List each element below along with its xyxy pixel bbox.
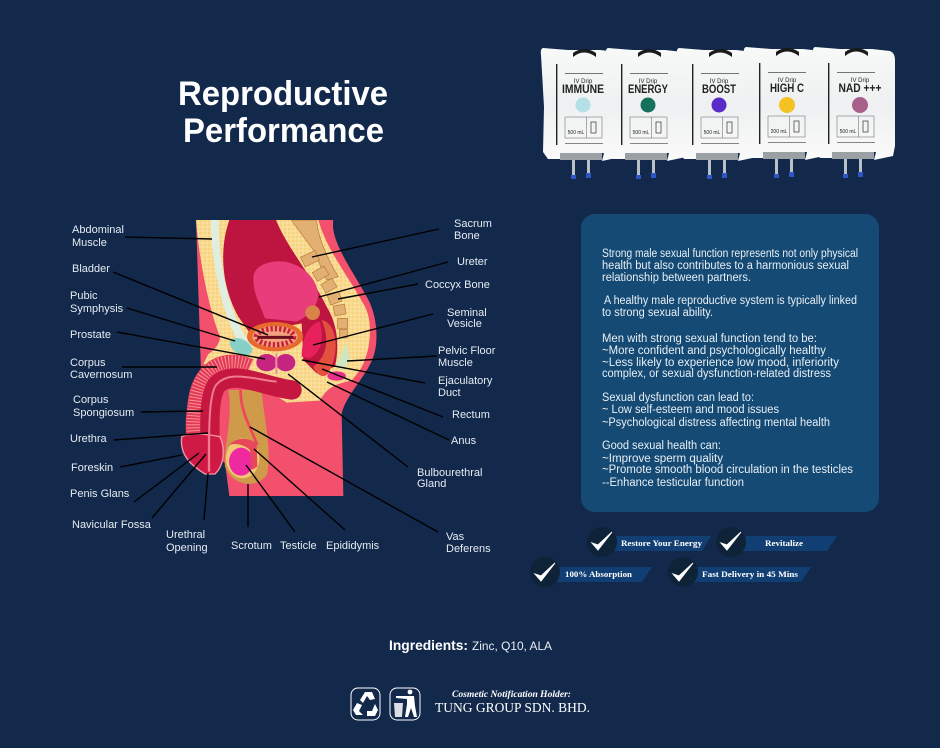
anatomy labels: Penis Glans — [70, 488, 130, 500]
anatomy labels: Pubic — [70, 290, 98, 302]
description text: relationship between partners. — [602, 272, 751, 284]
title: Reproductive — [178, 75, 388, 113]
bag: immune — [541, 48, 623, 179]
anatomy labels: Bone — [454, 230, 480, 242]
anatomy labels: Anus — [451, 435, 477, 447]
anatomy labels: Corpus — [70, 357, 106, 369]
vas deferens — [241, 390, 257, 445]
rectum — [313, 320, 336, 376]
anatomy labels: Symphysis — [70, 303, 124, 315]
bag: high c: HIGH C — [770, 81, 804, 95]
bag: immune: IMMUNE — [562, 82, 604, 96]
anatomy labels: Sacrum — [454, 218, 492, 230]
description text: Strong male sexual function represents not only physical — [602, 248, 858, 260]
bag: boost — [677, 48, 759, 179]
ingredients: Zinc, Q10, ALA — [472, 641, 552, 653]
bag: nad — [813, 47, 895, 178]
anatomy labels: Vesicle — [447, 318, 482, 330]
anatomy labels: Muscle — [72, 237, 107, 249]
ureter — [305, 305, 320, 320]
company name: Cosmetic Notification Holder: — [452, 689, 571, 699]
description text: A healthy male reproductive system is typically linked — [604, 295, 857, 307]
anatomy labels: Navicular Fossa — [72, 519, 152, 531]
anatomy labels: Bladder — [72, 263, 110, 275]
IV drip bags — [541, 47, 895, 179]
anatomy labels: Ejaculatory — [438, 375, 493, 387]
anatomy labels: Scrotum — [231, 540, 272, 552]
bag: energy: IV Drip — [639, 79, 658, 85]
intestine blob — [253, 261, 318, 322]
description text: ~ Low self-esteem and mood issues — [602, 404, 779, 416]
badge: absorption: 100% Absorption — [565, 570, 633, 579]
ingredients: Ingredients: — [389, 637, 468, 653]
anatomy labels: Coccyx Bone — [425, 279, 490, 291]
description text: health but also contributes to a harmonious sexual — [602, 260, 849, 272]
bag: nad: 500 mL — [840, 129, 857, 135]
anatomy labels: Corpus — [73, 394, 109, 406]
bag: nad: IV Drip — [851, 78, 870, 84]
anatomy labels: Seminal — [447, 307, 487, 319]
corpus spongiosum — [210, 378, 292, 440]
bag: boost: 500 mL — [704, 130, 721, 136]
badge: fast delivery: Fast Delivery in 45 Mins — [702, 570, 798, 579]
abdominal cavity — [223, 220, 337, 373]
description text: to strong sexual ability. — [602, 307, 713, 319]
anatomy labels: Vas — [446, 531, 465, 543]
anatomy labels: Epididymis — [326, 540, 380, 552]
anatomy labels: Deferens — [446, 543, 491, 555]
pelvic floor muscle — [335, 343, 350, 370]
anatomy labels: Foreskin — [71, 462, 113, 474]
description text: --Enhance testicular function — [602, 477, 744, 489]
description text: ~Less likely to experience low mood, inferiority — [602, 357, 839, 369]
badge: restore your energy — [587, 527, 711, 557]
pubic symphysis — [227, 335, 255, 359]
anatomy labels: Gland — [417, 478, 446, 490]
description text: ~Improve sperm quality — [602, 453, 723, 465]
badge: restore your energy: Restore Your Energy — [621, 539, 702, 548]
description text: Men with strong sexual function tend to be: — [602, 333, 817, 345]
anatomy labels: Opening — [166, 542, 208, 554]
body silhouette — [196, 220, 377, 496]
anatomy labels: Prostate — [70, 329, 111, 341]
icon: tidy man — [390, 688, 420, 720]
bag: boost: BOOST — [702, 82, 737, 96]
bladder — [247, 322, 303, 351]
description text: Good sexual health can: — [602, 440, 721, 452]
company name: TUNG GROUP SDN. BHD. — [435, 701, 590, 716]
abdominal muscle band — [211, 220, 253, 352]
corpus cavernosum — [194, 363, 250, 437]
bag: boost: IV Drip — [710, 79, 729, 85]
ingredients — [389, 637, 552, 653]
anatomy labels — [70, 218, 496, 555]
anatomy labels: Pelvic Floor — [438, 345, 496, 357]
title: Performance — [183, 112, 384, 150]
bag: high c: 200 mL — [771, 129, 788, 135]
bag: immune: IV Drip — [574, 79, 593, 85]
bag: energy — [606, 48, 688, 179]
icon: recycle — [351, 688, 380, 720]
anatomy labels: Urethral — [166, 529, 205, 541]
description text: Sexual dysfunction can lead to: — [602, 392, 754, 404]
scrotum — [225, 390, 269, 484]
anatomy labels: Cavernosum — [70, 369, 132, 381]
badge: absorption — [530, 557, 652, 587]
description text: complex, or sexual dysfunction-related distress — [602, 368, 831, 380]
anatomy labels: Spongiosum — [73, 407, 134, 419]
description text: ~Promote smooth blood circulation in the testicles — [602, 464, 853, 476]
bag: energy: 500 mL — [633, 130, 650, 136]
description text — [602, 248, 858, 489]
bag: energy: ENERGY — [628, 82, 668, 96]
anatomy labels: Ureter — [457, 256, 488, 268]
anatomy labels: Abdominal — [72, 224, 124, 236]
badge: revitalize — [716, 527, 837, 557]
anatomy diagram — [181, 220, 377, 496]
panel: description — [581, 214, 879, 512]
anatomy labels: Muscle — [438, 357, 473, 369]
anatomy labels: Testicle — [280, 540, 317, 552]
badge: revitalize: Revitalize — [765, 539, 804, 548]
badge: fast delivery — [668, 557, 811, 587]
bag: immune: 500 mL — [568, 130, 585, 136]
pointer lines — [113, 229, 449, 532]
bag: high c: IV Drip — [778, 78, 797, 84]
anatomy labels: Duct — [438, 387, 461, 399]
anatomy labels: Rectum — [452, 409, 490, 421]
anus — [327, 371, 346, 381]
testicle — [226, 438, 259, 478]
title — [178, 75, 388, 150]
fat layer — [196, 220, 370, 403]
anatomy labels: Urethra — [70, 433, 108, 445]
bag: high c — [744, 47, 826, 178]
company name — [435, 689, 590, 716]
sacrum and coccyx — [292, 221, 348, 338]
anatomy labels: Bulbourethral — [417, 467, 482, 479]
description text: ~Psychological distress affecting mental health — [602, 417, 830, 429]
bag: nad: NAD +++ — [838, 81, 882, 95]
prostate — [256, 354, 277, 371]
seminal vesicle — [302, 322, 322, 358]
description text: ~More confident and psychologically healthy — [602, 345, 826, 357]
glans — [181, 434, 223, 474]
